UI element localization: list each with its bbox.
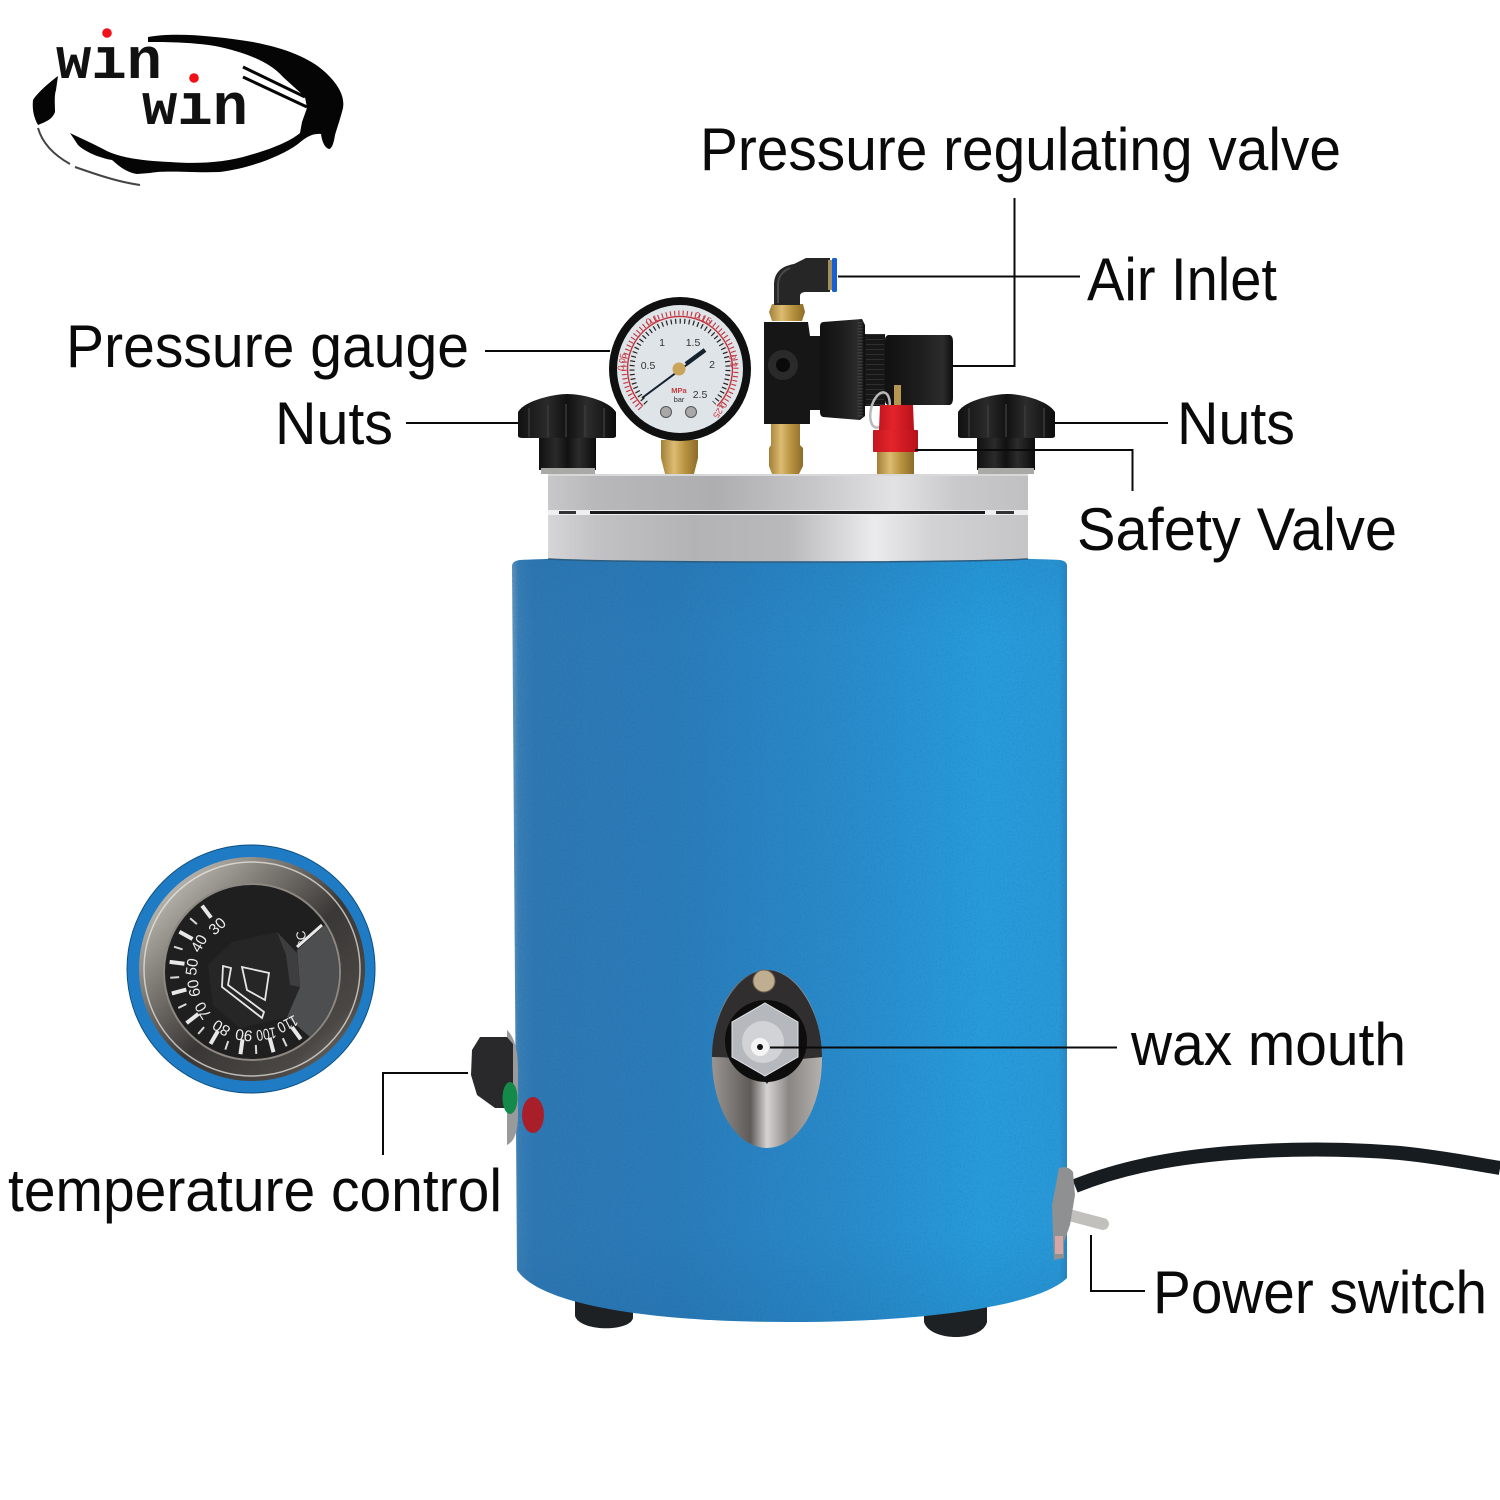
nozzle cone — [742, 1021, 784, 1063]
dial numbers: 70 — [192, 998, 215, 1022]
screw — [753, 970, 775, 992]
gauge red scale — [624, 313, 736, 409]
ink streaks — [243, 67, 307, 107]
plate lower half — [712, 970, 822, 1148]
label: wax mouth: wax mouth — [1130, 1011, 1406, 1078]
ink ring — [70, 35, 343, 174]
gauge stem — [661, 440, 698, 474]
label: nuts left: Nuts — [275, 390, 393, 457]
dial numbers: 60 — [185, 978, 204, 998]
lid upper plate — [548, 474, 1028, 510]
gauge black numbers: 1.5 — [686, 337, 700, 349]
dial pointer — [297, 925, 322, 947]
gauge red numbers: 0.1 — [644, 313, 660, 327]
switch lever — [1069, 1215, 1103, 1224]
red lamp — [522, 1097, 544, 1133]
gauge red numbers: 0.2 — [727, 354, 739, 368]
label: temperature control: temperature control — [8, 1157, 502, 1224]
plate upper half — [712, 970, 822, 1084]
steel ring — [139, 857, 365, 1081]
gauge bezel — [609, 297, 751, 441]
label: power switch: Power switch — [1153, 1259, 1487, 1326]
label: pressure regulating valve: Pressure regulating valve — [700, 116, 1341, 183]
dial numbers: 100 — [254, 1023, 277, 1044]
ink left blob — [33, 76, 58, 125]
pressure regulating valve — [764, 258, 953, 474]
label: safety valve — [915, 450, 1397, 563]
main blue cylinder — [510, 555, 1070, 1325]
left foot — [575, 1295, 633, 1328]
lid lower plate — [548, 515, 1028, 562]
dial numbers — [183, 914, 300, 1044]
logo: win win — [33, 28, 343, 185]
dial numbers: 80 — [210, 1015, 234, 1039]
temperature knob on body — [471, 1030, 544, 1145]
gauge black numbers — [641, 337, 715, 404]
regulator block — [764, 322, 822, 424]
thermostat dial inset — [127, 845, 375, 1093]
red cap — [879, 405, 914, 430]
label: power switch — [1091, 1235, 1487, 1326]
right foot — [924, 1295, 987, 1337]
knob — [471, 1037, 513, 1108]
label: temperature control — [8, 1073, 502, 1224]
nozzle hole — [757, 1044, 763, 1050]
major ticks — [170, 906, 301, 1054]
power cable — [1075, 1150, 1500, 1186]
left knob — [518, 394, 616, 474]
red base — [873, 430, 918, 452]
switch plate — [1052, 1167, 1075, 1260]
logo wordmark line two: win — [142, 77, 248, 142]
dial numbers: 110 — [274, 1011, 300, 1036]
gauge black numbers: 0.5 — [641, 360, 655, 372]
green lamp — [502, 1082, 518, 1114]
dial numbers: 50 — [183, 957, 202, 977]
elbow fitting — [774, 258, 830, 305]
wax mouth — [712, 970, 822, 1148]
regulator thread — [865, 334, 885, 406]
gauge face — [617, 305, 743, 433]
gauge screws — [660, 406, 672, 418]
gauge hub — [672, 362, 686, 376]
blue ring — [127, 845, 375, 1093]
pressure gauge — [609, 297, 751, 474]
safety pin — [894, 385, 901, 406]
dial numbers: 90 — [234, 1025, 254, 1044]
power switch — [1052, 1167, 1103, 1260]
label: pressure regulating valve — [700, 116, 1341, 366]
dial face — [163, 883, 341, 1061]
gauge black numbers: 2 — [709, 359, 715, 371]
brass hex — [877, 452, 914, 474]
gauge black numbers: 2.5 — [693, 389, 707, 401]
minor ticks — [170, 918, 287, 1054]
label: pressure gauge: Pressure gauge — [66, 313, 469, 380]
upper brass nut — [769, 304, 805, 321]
blue push cap — [832, 258, 837, 292]
right knob — [958, 394, 1055, 474]
gauge red numbers: 0.25 — [711, 400, 729, 420]
hex nut — [732, 1003, 798, 1076]
ink thin arc — [38, 128, 140, 185]
heater symbol — [222, 966, 269, 1018]
degree symbol: °C — [293, 930, 310, 947]
safety valve — [867, 385, 918, 474]
gauge red numbers: MPa — [671, 386, 688, 395]
gauge needle — [642, 358, 696, 398]
gauge black numbers: 1 — [659, 337, 665, 349]
nozzle surround — [725, 1000, 807, 1082]
label: air inlet: Air Inlet — [1087, 246, 1277, 313]
gauge black numbers: bar — [674, 395, 685, 404]
bezel — [507, 1030, 518, 1145]
regulator ring — [820, 319, 865, 420]
feet — [575, 1295, 987, 1337]
gauge red numbers: 0.15 — [693, 310, 713, 326]
red dot two — [189, 73, 199, 83]
dial numbers: 40 — [188, 932, 212, 956]
logo wordmark line one: win — [56, 31, 162, 96]
gauge black scale — [632, 321, 728, 403]
lower brass fitting — [769, 422, 803, 474]
label: nuts right: Nuts — [1177, 390, 1295, 457]
gauge red numbers: 0.05 — [616, 352, 628, 372]
octagonal knob — [208, 932, 300, 1028]
safety ring — [867, 390, 893, 430]
right light patch — [287, 925, 339, 1037]
regulator adjusting cap — [885, 335, 953, 405]
lid gap — [548, 510, 1028, 515]
regulator port — [768, 350, 798, 380]
gauge red numbers — [616, 310, 739, 420]
red dot one — [102, 28, 112, 38]
label: safety valve: Safety Valve — [1077, 496, 1397, 563]
dial numbers: 30 — [206, 914, 230, 939]
